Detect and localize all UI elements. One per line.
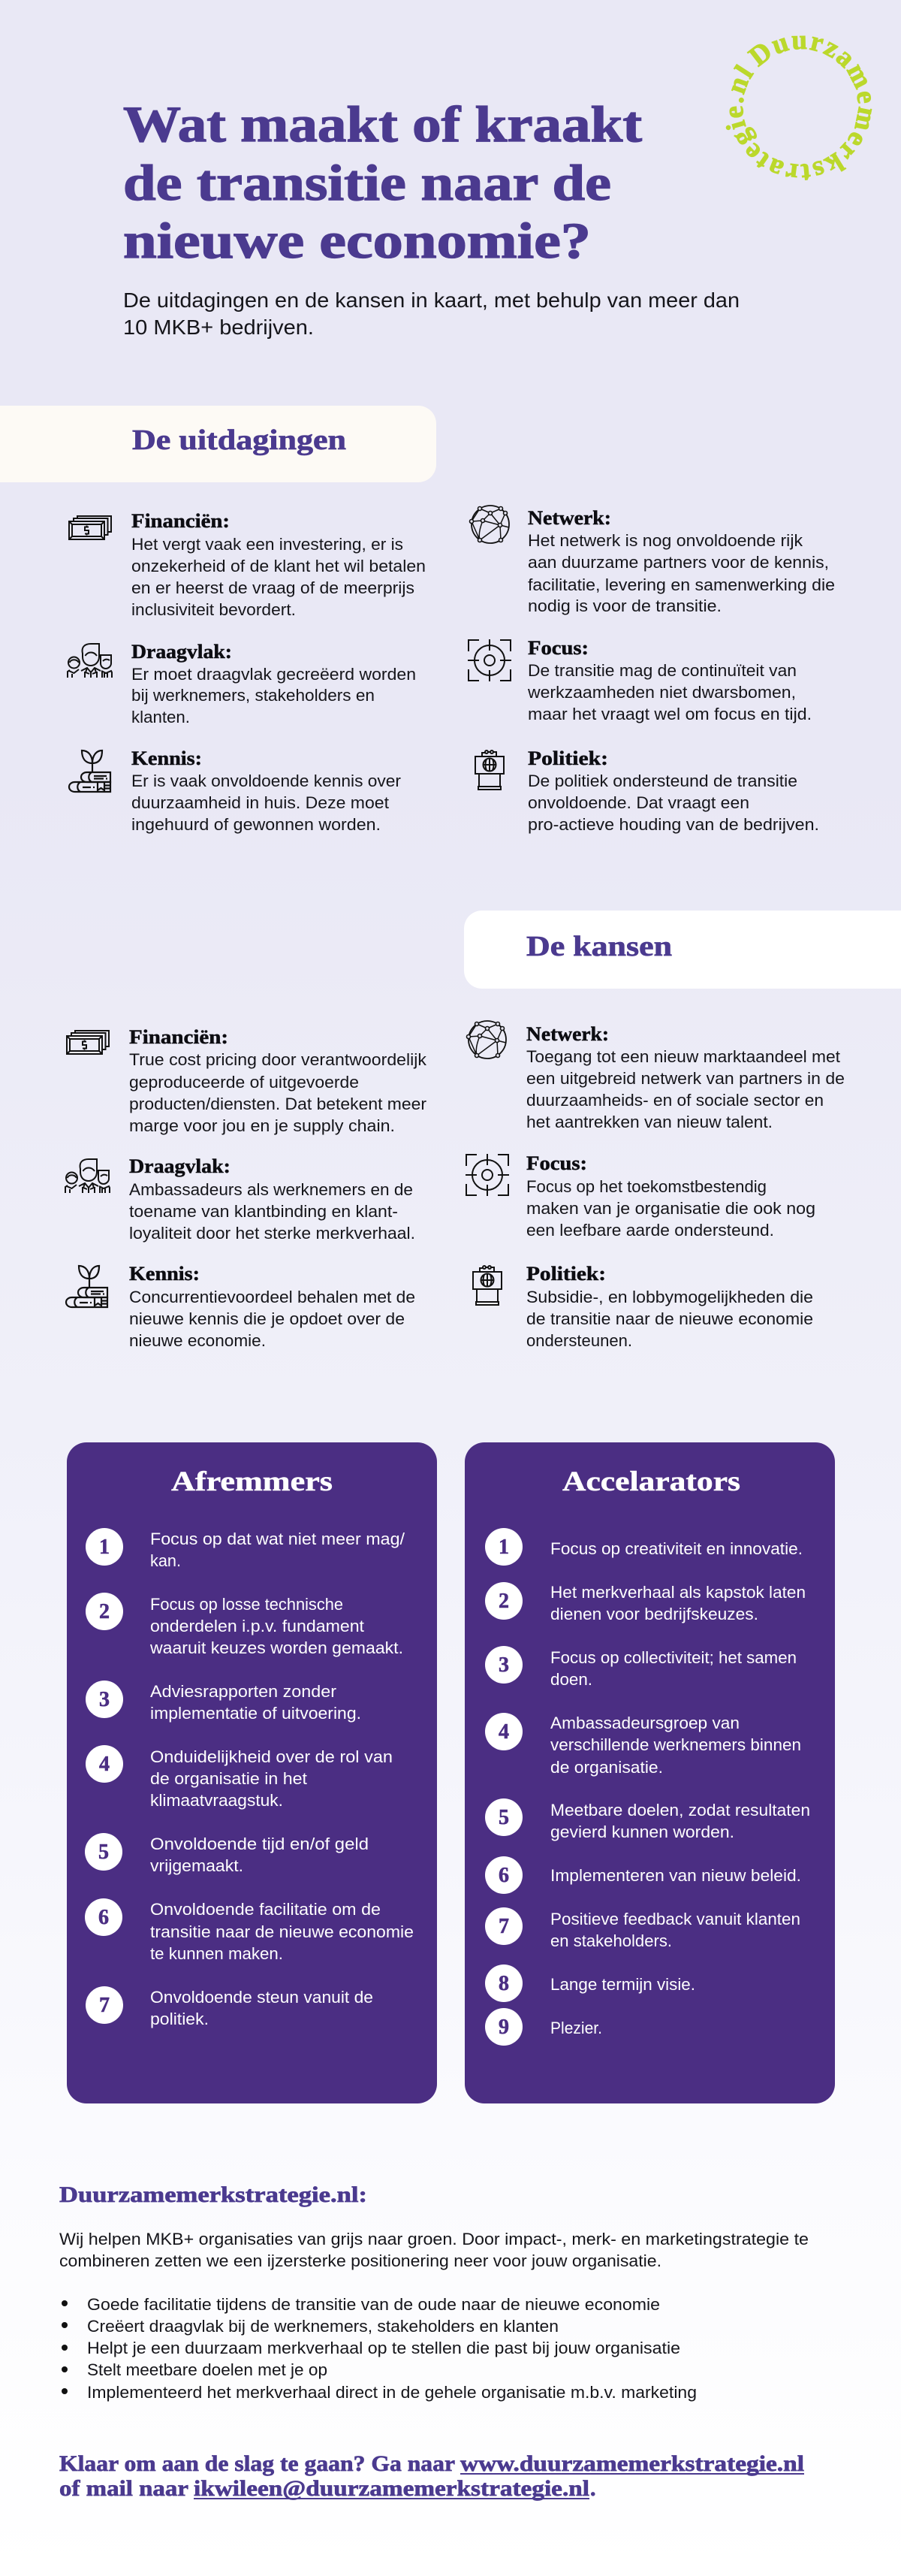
item: focus: maken van je organisatie die ook nog xyxy=(526,1199,815,1218)
item 1 xyxy=(485,1528,803,1566)
panel: accelarators xyxy=(465,1442,835,2103)
item 3: implementatie of uitvoering. xyxy=(150,1704,361,1723)
item 3 xyxy=(86,1681,361,1723)
item 3: Focus op collectiviteit; het samen xyxy=(550,1648,797,1667)
call to action: ikwileen@duurzamemerkstrategie.nl xyxy=(194,2476,589,2501)
item: focus xyxy=(527,637,812,723)
title xyxy=(123,95,642,269)
item: netwerk: het aantrekken van nieuw talent. xyxy=(526,1113,773,1131)
panel: de kansen heading: De kansen xyxy=(526,931,672,962)
item 4 xyxy=(86,1745,393,1810)
item 3 xyxy=(485,1646,797,1689)
title: de transitie naar de xyxy=(123,154,611,211)
text block: intro: combineren zetten we een ijzersterke positionering neer voor jouw organisatie. xyxy=(59,2251,661,2270)
item: financien xyxy=(129,1026,427,1135)
item: politiek: De politiek ondersteund de transitie xyxy=(528,772,797,790)
item: netwerk: aan duurzame partners voor de kennis, xyxy=(528,553,829,572)
item: netwerk: Netwerk: xyxy=(528,507,611,529)
item 9: 9 xyxy=(499,2016,509,2039)
item: financien: inclusiviteit bevordert. xyxy=(131,600,296,619)
item: kennis xyxy=(131,747,401,834)
item 9 xyxy=(485,2008,602,2046)
item: financien: marge voor jou en je supply chain. xyxy=(129,1116,395,1135)
item 3: 3 xyxy=(499,1653,509,1677)
item: focus xyxy=(526,1152,815,1240)
item: kennis: Kennis: xyxy=(129,1263,200,1285)
item: financien: en er heerst de vraag of de meerprijs xyxy=(131,578,414,597)
item: netwerk: Het netwerk is nog onvoldoende rijk xyxy=(528,531,803,550)
item 7: Positieve feedback vanuit klanten xyxy=(550,1910,800,1928)
item: focus: Focus: xyxy=(526,1152,587,1174)
item 8: 8 xyxy=(499,1972,509,1995)
title: Wat maakt of kraakt xyxy=(123,95,642,153)
item 6: 6 xyxy=(98,1906,109,1929)
item 6: te kunnen maken. xyxy=(150,1944,283,1963)
item 4: verschillende werknemers binnen xyxy=(550,1735,801,1754)
item 5: vrijgemaakt. xyxy=(150,1856,243,1875)
item 9: Plezier. xyxy=(550,2019,602,2037)
icon: plant on books xyxy=(66,1266,107,1307)
item: draagvlak: klanten. xyxy=(131,708,190,726)
item 6 xyxy=(485,1856,801,1894)
item: focus: een leefbare aarde ondersteund. xyxy=(526,1221,774,1240)
bullet list xyxy=(62,2295,697,2402)
bullet list: Stelt meetbare doelen met je op xyxy=(87,2360,327,2379)
item: draagvlak xyxy=(129,1155,415,1243)
item: financien: Financiën: xyxy=(131,510,230,532)
item: politiek: Politiek: xyxy=(528,747,608,769)
item: politiek: Politiek: xyxy=(526,1263,606,1285)
panel: afremmers xyxy=(67,1442,437,2103)
item 4: 4 xyxy=(99,1753,110,1776)
item: focus: De transitie mag de continuïteit van xyxy=(528,661,797,680)
item 2 xyxy=(485,1582,806,1623)
item: draagvlak: toename van klantbinding en klant- xyxy=(129,1202,398,1221)
item 2: Het merkverhaal als kapstok laten xyxy=(550,1583,806,1602)
item 6 xyxy=(85,1898,414,1963)
item: financien: geproduceerde of uitgevoerde xyxy=(129,1073,359,1092)
icon: focus target xyxy=(468,639,511,681)
item: focus: Focus: xyxy=(528,637,589,659)
panel: kansen right column xyxy=(466,1021,845,1350)
text block: intro xyxy=(59,2230,809,2270)
item 3: Adviesrapporten zonder xyxy=(150,1682,336,1701)
heading: duurzamemerkstrategie.nl: Duurzamemerkstrategie.nl: xyxy=(59,2182,367,2207)
item 7: 7 xyxy=(99,1994,110,2017)
item: netwerk: een uitgebreid netwerk van partners in de xyxy=(526,1069,845,1088)
item: politiek xyxy=(526,1263,813,1350)
item: financien: True cost pricing door verantwoordelijk xyxy=(129,1050,427,1069)
item: financien xyxy=(131,510,426,619)
item: financien: Het vergt vaak een investering, er is xyxy=(131,535,403,554)
item 7: en stakeholders. xyxy=(550,1931,672,1950)
item: netwerk: nodig is voor de transitie. xyxy=(528,596,722,615)
item: politiek xyxy=(528,747,819,834)
icon: money xyxy=(69,516,111,539)
icon: network globe xyxy=(470,506,509,543)
item 1 xyxy=(86,1528,405,1570)
item 1: 1 xyxy=(499,1536,509,1559)
icon: plant on books xyxy=(69,750,110,792)
subtitle: 10 MKB+ bedrijven. xyxy=(123,316,314,339)
item: financien: producten/diensten. Dat betekent meer xyxy=(129,1095,426,1113)
item 4: Onduidelijkheid over de rol van xyxy=(150,1747,393,1766)
title: nieuwe economie? xyxy=(123,212,591,269)
panel: de uitdagingen heading: De uitdagingen xyxy=(132,424,346,456)
item 4: 4 xyxy=(499,1720,509,1744)
item: netwerk: Toegang tot een nieuw marktaandeel met xyxy=(526,1047,840,1066)
item 4: de organisatie. xyxy=(550,1758,663,1777)
panel: de uitdagingen heading xyxy=(0,406,436,482)
item: politiek: ondersteunen. xyxy=(526,1331,632,1350)
item: draagvlak: Draagvlak: xyxy=(131,641,232,663)
bullet list: Goede facilitatie tijdens de transitie van de oude naar de nieuwe economie xyxy=(87,2295,660,2314)
call to action: . xyxy=(590,2476,596,2501)
bullet list: Creëert draagvlak bij de werknemers, stakeholders en klanten xyxy=(87,2317,559,2336)
icon: podium xyxy=(475,750,504,790)
item: focus: maar het vraagt wel om focus en tijd. xyxy=(528,705,812,723)
icon: people xyxy=(68,644,112,678)
subtitle xyxy=(123,288,740,339)
item 8 xyxy=(485,1964,695,2002)
item: focus: Focus op het toekomstbestendig xyxy=(526,1177,767,1196)
item 5: 5 xyxy=(499,1806,509,1829)
item: draagvlak: Draagvlak: xyxy=(129,1155,231,1177)
item: kennis: ingehuurd of gewonnen worden. xyxy=(131,815,381,834)
item 5 xyxy=(85,1833,369,1875)
heading: accelarators: Accelarators xyxy=(562,1466,740,1497)
item 2: Focus op losse technische xyxy=(150,1595,343,1614)
item: netwerk: duurzaamheids- en of sociale sector en xyxy=(526,1091,824,1110)
item 1: 1 xyxy=(99,1536,110,1559)
item 4: de organisatie in het xyxy=(150,1769,307,1788)
call to action: Klaar om aan de slag te gaan? Ga naar xyxy=(59,2451,455,2476)
item: kennis: nieuwe kennis die je opdoet over de xyxy=(129,1309,405,1328)
item 4: klimaatvraagstuk. xyxy=(150,1791,283,1810)
heading: afremmers: Afremmers xyxy=(171,1466,333,1497)
call to action xyxy=(59,2451,804,2501)
item 6: Implementeren van nieuw beleid. xyxy=(550,1866,801,1885)
item 7 xyxy=(86,1986,373,2028)
item: focus: werkzaamheden niet dwarsbomen, xyxy=(527,683,796,702)
item 2: 2 xyxy=(99,1600,110,1623)
item: netwerk: facilitatie, levering en samenwerking die xyxy=(528,575,835,594)
item 1: Focus op creativiteit en innovatie. xyxy=(550,1539,803,1558)
item: kennis: Er is vaak onvoldoende kennis over xyxy=(131,772,401,790)
item 3: doen. xyxy=(550,1670,592,1689)
item 7: politiek. xyxy=(150,2010,209,2028)
item 4: Ambassadeursgroep van xyxy=(550,1714,740,1732)
text block: intro: Wij helpen MKB+ organisaties van grijs naar groen. Door impact-, merk- en marketingstrategie te xyxy=(59,2230,809,2248)
item 1: kan. xyxy=(150,1551,181,1570)
item 3: 3 xyxy=(99,1688,110,1711)
icon: podium xyxy=(473,1266,502,1305)
item 5: gevierd kunnen worden. xyxy=(550,1823,734,1841)
item 2: waaruit keuzes worden gemaakt. xyxy=(149,1638,403,1657)
item: kennis: duurzaamheid in huis. Deze moet xyxy=(131,793,389,812)
item 6: 6 xyxy=(499,1864,509,1887)
item: netwerk: Netwerk: xyxy=(526,1023,609,1045)
item: kennis: Kennis: xyxy=(131,747,202,769)
panel: de kansen heading xyxy=(464,911,901,989)
icon: money xyxy=(67,1031,109,1054)
icon: focus target xyxy=(466,1154,509,1196)
item: kennis: nieuwe economie. xyxy=(129,1331,266,1350)
item 1: Focus op dat wat niet meer mag/ xyxy=(150,1530,405,1548)
item 5: 5 xyxy=(98,1841,109,1864)
item: financien: onzekerheid of de klant het wil betalen xyxy=(131,557,426,575)
item: netwerk xyxy=(528,507,835,615)
item 5: Onvoldoende tijd en/of geld xyxy=(150,1835,369,1853)
item 2: dienen voor bedrijfskeuzes. xyxy=(550,1605,758,1623)
panel: kansen left column xyxy=(65,1026,427,1350)
item 7: Onvoldoende steun vanuit de xyxy=(150,1988,373,2007)
bullet list: Implementeerd het merkverhaal direct in de gehele organisatie m.b.v. marketing xyxy=(87,2383,697,2402)
bullet list: Helpt je een duurzaam merkverhaal op te stellen die past bij jouw organisatie xyxy=(87,2339,680,2357)
item 6: Onvoldoende facilitatie om de xyxy=(150,1900,381,1919)
item 4 xyxy=(485,1713,801,1777)
item 8: Lange termijn visie. xyxy=(550,1975,695,1994)
item: netwerk xyxy=(526,1023,845,1131)
item 7 xyxy=(485,1907,800,1950)
item 2: onderdelen i.p.v. fundament xyxy=(150,1617,364,1635)
icon: network globe xyxy=(467,1021,506,1058)
item: draagvlak xyxy=(131,641,416,726)
item 2: 2 xyxy=(499,1590,509,1613)
item: kennis: Concurrentievoordeel behalen met de xyxy=(129,1288,415,1306)
item: politiek: pro-actieve houding van de bedrijven. xyxy=(528,815,819,834)
item 6: transitie naar de nieuwe economie xyxy=(150,1922,414,1941)
panel: uitdagingen left column xyxy=(68,510,426,834)
item: draagvlak: loyaliteit door het sterke merkverhaal. xyxy=(129,1224,415,1243)
panel: uitdagingen right column xyxy=(468,506,835,834)
item: politiek: de transitie naar de nieuwe economie xyxy=(526,1309,813,1328)
item: draagvlak: Er moet draagvlak gecreëerd worden xyxy=(131,665,416,684)
item: politiek: Subsidie-, en lobbymogelijkheden die xyxy=(526,1288,813,1306)
item: draagvlak: Ambassadeurs als werknemers en de xyxy=(129,1180,413,1199)
icon: people xyxy=(65,1159,110,1193)
item: politiek: onvoldoende. Dat vraagt een xyxy=(528,793,749,812)
call to action: of mail naar xyxy=(59,2476,188,2501)
item 2 xyxy=(86,1593,403,1657)
item: kennis xyxy=(129,1263,415,1350)
call to action: www.duurzamemerkstrategie.nl xyxy=(460,2451,804,2476)
item 5: Meetbare doelen, zodat resultaten xyxy=(550,1801,810,1820)
item 7: 7 xyxy=(499,1915,509,1938)
item 5 xyxy=(485,1798,810,1841)
item: financien: Financiën: xyxy=(129,1026,228,1048)
subtitle: De uitdagingen en de kansen in kaart, met behulp van meer dan xyxy=(123,288,740,312)
item: draagvlak: bij werknemers, stakeholders en xyxy=(131,686,375,705)
logo: circular brand text: Duurzamemerkstrategie.nl xyxy=(725,36,872,180)
